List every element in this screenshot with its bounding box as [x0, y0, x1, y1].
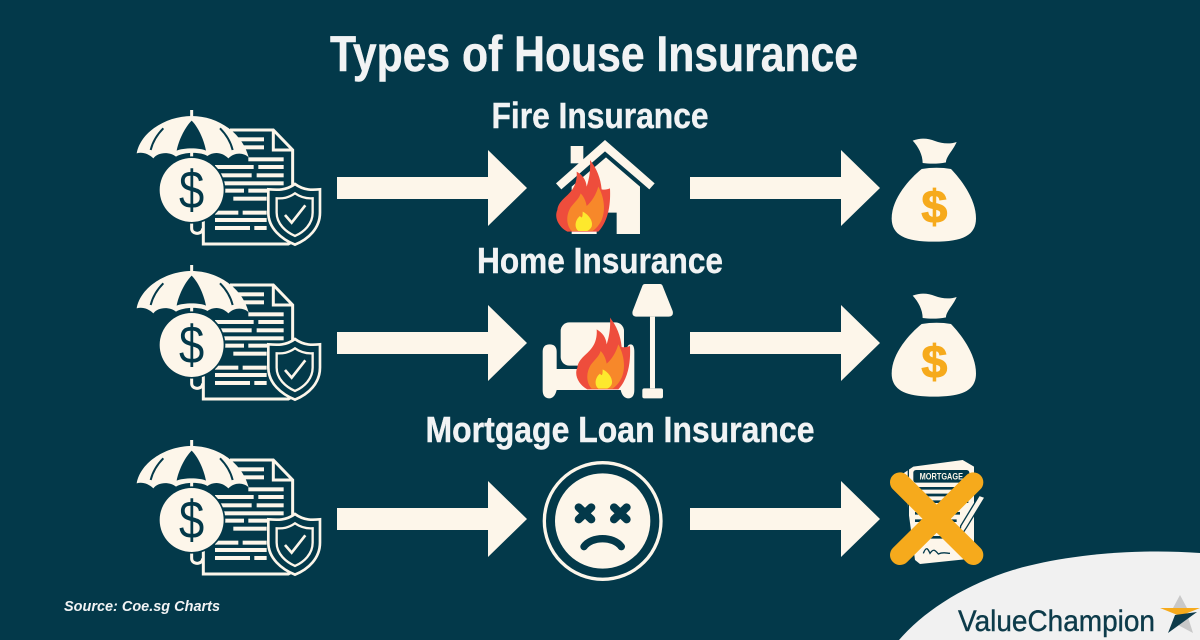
icon: burning house [556, 140, 655, 234]
arrow: fire to payout row 1 [690, 150, 880, 226]
arrow: policy to fire row 1 [337, 150, 527, 226]
logo panel [899, 552, 1200, 640]
arrow: sad face to mortgage row 3 [690, 481, 880, 557]
icon: insurance policy row 1: $ [179, 161, 204, 220]
icon: money bag row 1: $ [921, 181, 947, 233]
arrow: fire to payout row 2 [690, 305, 880, 381]
heading: Mortgage Loan Insurance: Mortgage Loan Insurance [426, 409, 814, 450]
icon: money bag row 2 [892, 294, 976, 397]
icon: insurance policy row 3: $ [179, 491, 204, 550]
icon: money bag row 1 [892, 139, 976, 242]
heading: Home Insurance: Home Insurance [477, 240, 723, 281]
icon: burning sofa and lamp [543, 284, 673, 398]
logo wordmark: ValueChampion [958, 605, 1155, 638]
title: Types of House Insurance [330, 26, 858, 82]
source note: Source: Coe.sg Charts [64, 599, 220, 615]
heading: Fire Insurance: Fire Insurance [492, 95, 708, 136]
icon: sad face [544, 463, 661, 579]
arrow: policy to fire row 2 [337, 305, 527, 381]
icon: insurance policy row 2: $ [179, 316, 204, 375]
icon: insurance policy row 2 [137, 265, 320, 400]
logo star [1160, 595, 1200, 633]
icon: insurance policy row 3 [137, 440, 320, 575]
icon: money bag row 2: $ [921, 336, 947, 388]
icon: crossed-out mortgage document: MORTGAGE [920, 472, 963, 482]
icon: crossed-out mortgage document [900, 460, 985, 564]
arrow: policy to sad face row 3 [337, 481, 527, 557]
icon: insurance policy row 1 [137, 110, 320, 245]
